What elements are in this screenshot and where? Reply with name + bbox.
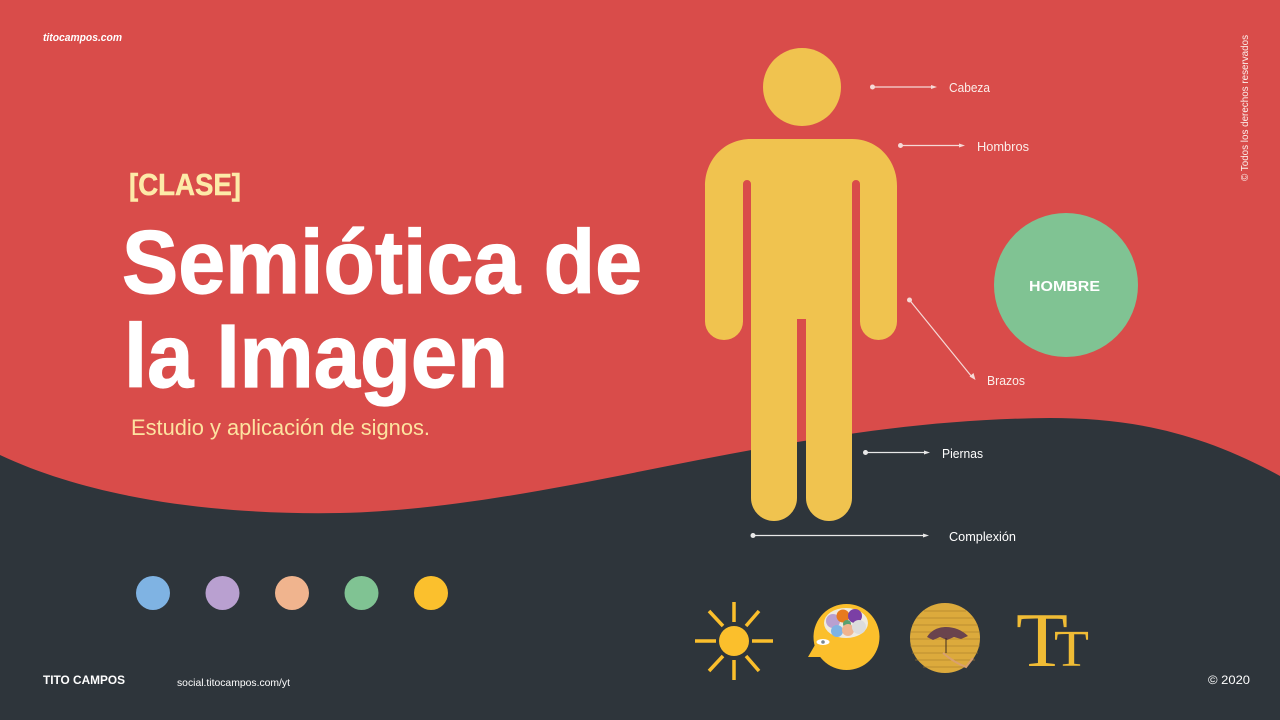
annotation: hombros: Hombros [977, 140, 1029, 154]
annotation: brazos [907, 298, 1025, 388]
title: Semiótica de [122, 213, 642, 313]
dark wave background [0, 418, 1280, 720]
annotation: complexión [750, 530, 1016, 544]
footer: author: TITO CAMPOS [43, 673, 125, 687]
title [122, 213, 642, 407]
badge: hombre: HOMBRE [1029, 279, 1100, 295]
icon: typography TT: T [1016, 597, 1068, 683]
annotation: complexión: Complexión [949, 530, 1016, 544]
annotation: cabeza: Cabeza [949, 81, 990, 95]
human figure [705, 48, 897, 521]
figure head [763, 48, 841, 126]
subtitle: Estudio y aplicación de signos. [131, 415, 430, 440]
footer: copyright: © 2020 [1208, 675, 1250, 687]
title: la Imagen [124, 307, 508, 407]
tag: clase: [CLASE] [129, 167, 241, 202]
vertical copyright note: © Todos los derechos reservados [1240, 35, 1251, 181]
annotation: cabeza [870, 81, 990, 95]
color palette dots [136, 576, 448, 610]
icon: typography TT [1016, 597, 1089, 683]
annotation: piernas [863, 447, 983, 461]
figure body [705, 139, 897, 521]
icon: typography TT: T [1054, 621, 1089, 678]
annotation: brazos: Brazos [987, 374, 1025, 388]
badge: hombre [994, 213, 1138, 357]
footer: social link: social.titocampos.com/yt [177, 677, 290, 689]
icon: sun [695, 602, 773, 680]
annotation: piernas: Piernas [942, 447, 983, 461]
icon: head with colored thoughts [808, 604, 880, 670]
website label: titocampos.com [43, 32, 122, 44]
annotation: hombros [898, 140, 1029, 154]
icon: umbrella photo [910, 603, 980, 673]
